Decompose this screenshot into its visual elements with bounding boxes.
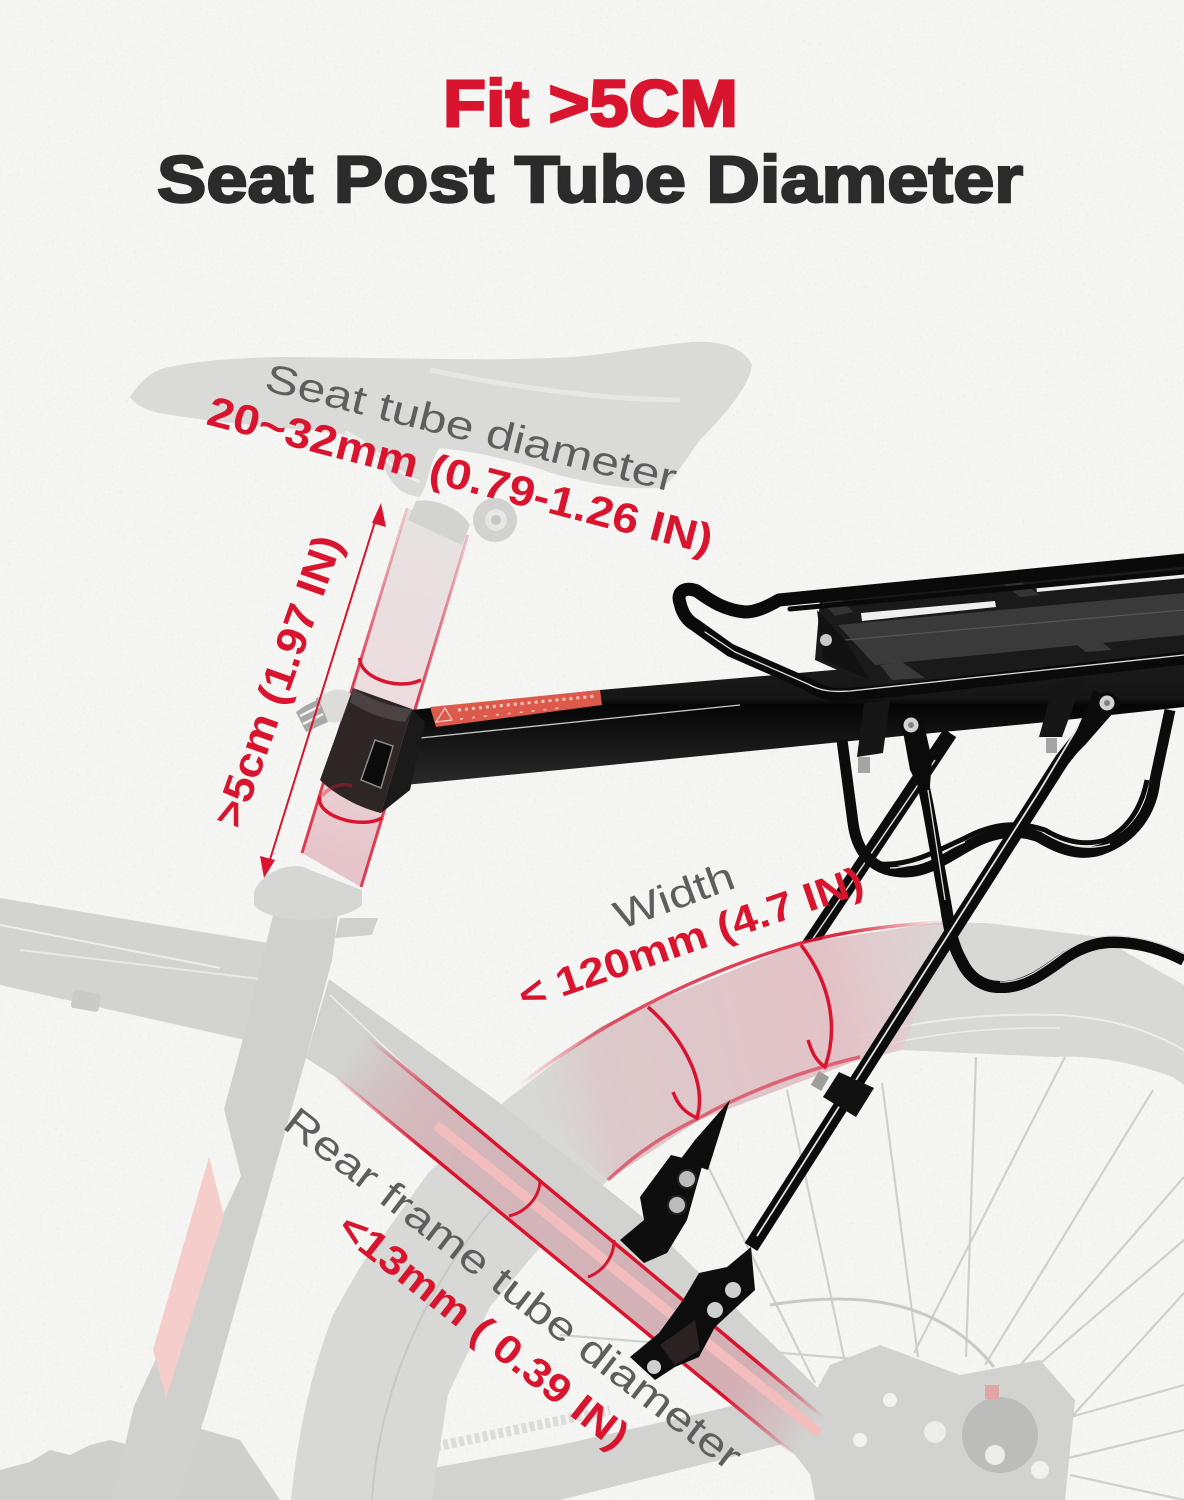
bike frame seat stay bbox=[306, 979, 870, 1500]
rack rear diagonal strut behind tire bbox=[809, 733, 950, 945]
value: rear frame tube: <13mm ( 0.39 IN) bbox=[329, 1204, 637, 1458]
lower stay bracket bbox=[630, 1247, 755, 1380]
rack front strut with curved tail bbox=[900, 715, 1184, 987]
red reflector on seat tube bbox=[153, 1157, 224, 1398]
rack strut bolts bbox=[900, 692, 1118, 736]
seat post binder collar bbox=[254, 866, 362, 920]
seat post measurement rings bbox=[319, 658, 421, 822]
rack mid strut clamp bbox=[811, 1071, 874, 1117]
rear tire bbox=[291, 923, 1184, 1500]
rear hub and disc brake bbox=[800, 1345, 1075, 1500]
rack mounting clamps bbox=[857, 677, 1084, 773]
saddle bbox=[130, 342, 752, 497]
rear frame measurement arcs bbox=[509, 1180, 614, 1277]
black rack tube bbox=[405, 640, 1184, 785]
value: seat post length: >5cm (1.97 IN) bbox=[204, 529, 351, 833]
brake cable bbox=[770, 1299, 994, 1367]
label: rear frame tube diameter: Rear frame tube diameter bbox=[276, 1099, 750, 1479]
length arrow bbox=[260, 503, 386, 878]
seat post clamp bbox=[320, 688, 425, 813]
bicycle wheel spokes bbox=[560, 1057, 1184, 1500]
title line 1: Fit >5CM bbox=[443, 66, 738, 140]
clamp thumb bolt bbox=[296, 684, 360, 732]
label: width: Width bbox=[608, 854, 741, 938]
rear frame tube highlight bbox=[337, 1034, 823, 1455]
rack back hoop bbox=[842, 710, 1170, 872]
lower chainstay and chain bbox=[420, 1400, 800, 1500]
label: seat tube diameter: Seat tube diameter bbox=[261, 356, 681, 501]
value: seat tube range: 20~32mm (0.79-1.26 IN) bbox=[203, 387, 718, 563]
rack right diagonal strut bbox=[751, 690, 1120, 1247]
rack platform bbox=[815, 565, 1184, 690]
value: tire width: < 120mm (4.7 IN) bbox=[513, 859, 869, 1019]
bike frame seat tube bbox=[112, 895, 378, 1500]
bike frame top tube bbox=[0, 898, 305, 1040]
red warning label bbox=[430, 690, 602, 727]
saddle clamp bolt bbox=[473, 498, 517, 542]
upper stay bracket bbox=[620, 1100, 730, 1263]
tire highlight: width measurement zone bbox=[520, 922, 950, 1180]
rack outer rail bbox=[679, 560, 1184, 695]
chainring bbox=[0, 1420, 280, 1500]
width measurement arcs bbox=[648, 945, 831, 1118]
seat post tube bbox=[302, 500, 470, 887]
title line 2: Seat Post Tube Diameter bbox=[157, 142, 1023, 216]
